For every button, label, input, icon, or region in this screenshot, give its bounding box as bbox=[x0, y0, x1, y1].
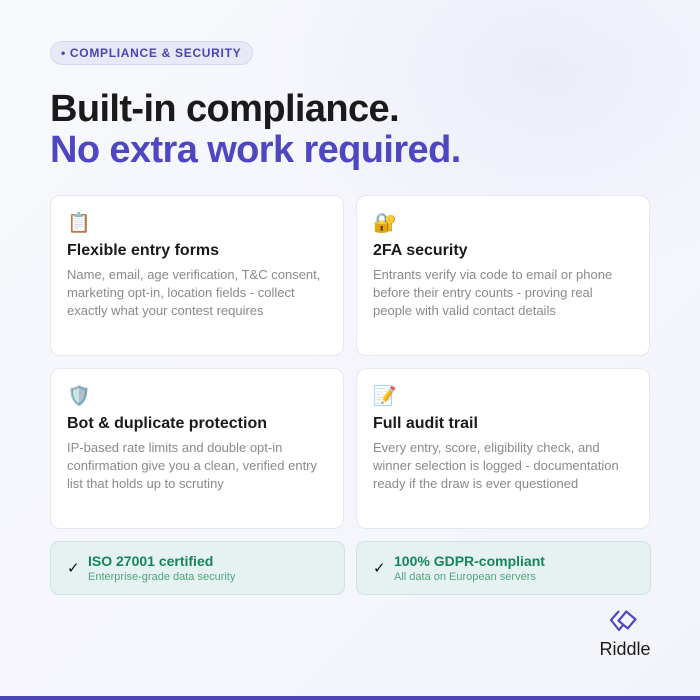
panel: bot protection: IP-based rate limits and double opt-in confirmation give you a clean, verified entry list that holds up to scrutiny bbox=[67, 440, 317, 491]
badge: ISO bbox=[50, 541, 345, 595]
tag pill bbox=[50, 41, 253, 65]
icon: memo: 📝 bbox=[373, 385, 397, 407]
logo: Riddle: Riddle bbox=[599, 639, 651, 659]
panel: bot protection: Bot & duplicate protection bbox=[67, 415, 267, 432]
panel: 2FA security: Entrants verify via code to email or phone before their entry counts - proving real people with valid contact details bbox=[373, 267, 612, 318]
panel: bot protection bbox=[50, 368, 344, 529]
badge: ISO: ✓ bbox=[67, 560, 80, 577]
badge: ISO: Enterprise-grade data security bbox=[88, 571, 235, 583]
panel: audit trail bbox=[356, 368, 650, 529]
title line 2: No extra work required. bbox=[50, 129, 461, 171]
panel: flexible entry forms: Flexible entry forms bbox=[67, 242, 219, 259]
icon: shield: 🛡️ bbox=[67, 385, 91, 407]
panel: flexible entry forms: Name, email, age verification, T&C consent, marketing opt-in, location fields - collect exactly what your contest requires bbox=[67, 267, 320, 318]
badge: GDPR: ✓ bbox=[373, 560, 386, 577]
panel: 2FA security bbox=[356, 195, 650, 356]
tag pill: • COMPLIANCE & SECURITY bbox=[61, 46, 241, 60]
badge: GDPR: All data on European servers bbox=[394, 571, 536, 583]
badge: ISO: ISO 27001 certified bbox=[88, 553, 213, 569]
icon: clipboard: 📋 bbox=[67, 212, 91, 234]
icon: lock: 🔐 bbox=[373, 212, 397, 234]
logo: Riddle bbox=[599, 610, 651, 659]
badge: GDPR: 100% GDPR-compliant bbox=[394, 553, 545, 569]
panel: flexible entry forms bbox=[50, 195, 344, 356]
badge: GDPR bbox=[356, 541, 651, 595]
title line 1: Built-in compliance. bbox=[50, 88, 399, 130]
panel: audit trail: Full audit trail bbox=[373, 415, 478, 432]
panel: audit trail: Every entry, score, eligibility check, and winner selection is logged - documentation ready if the draw is ever questioned bbox=[373, 440, 619, 491]
panel: 2FA security: 2FA security bbox=[373, 242, 468, 259]
